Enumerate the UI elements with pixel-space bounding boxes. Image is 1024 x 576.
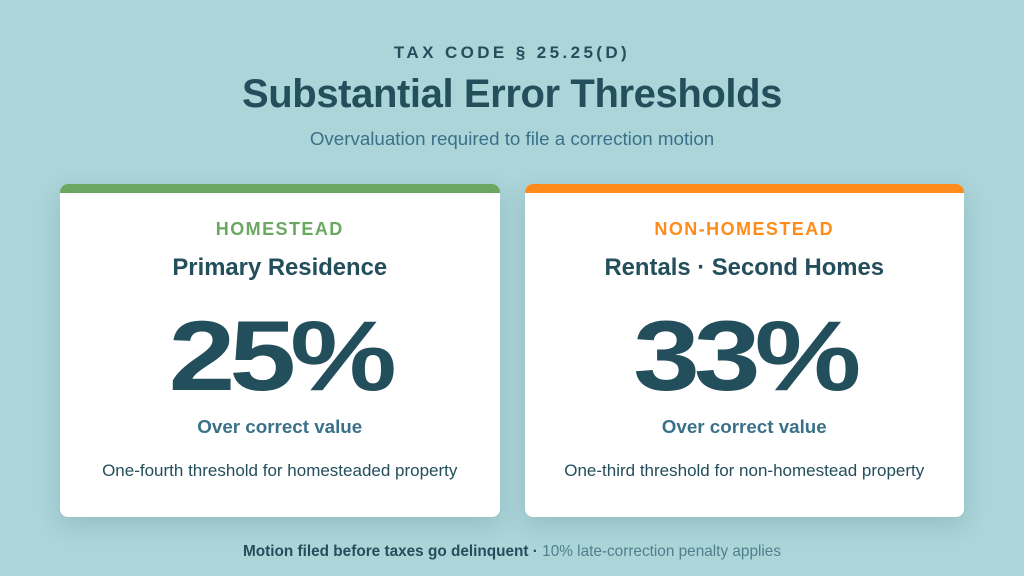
footer note: Motion filed before taxes go delinquent · 10% late-correction penalty applies bbox=[243, 543, 781, 560]
caption: over correct value: Over correct value bbox=[197, 416, 362, 437]
subtitle: Overvaluation required to file a correction motion bbox=[310, 128, 714, 149]
panel accent bar: orange bbox=[524, 184, 964, 193]
panel: homestead bbox=[60, 184, 500, 517]
caption: over correct value: Over correct value bbox=[662, 416, 827, 437]
description: non-homestead threshold: One-third threshold for non-homestead property bbox=[564, 461, 924, 480]
big number: 25%: 25% bbox=[169, 301, 391, 412]
category label: homestead: HOMESTEAD bbox=[216, 219, 344, 239]
heading: rentals and second homes: Rentals · Second Homes bbox=[604, 254, 884, 281]
heading: primary residence: Primary Residence bbox=[172, 254, 387, 281]
panel accent bar: green bbox=[60, 184, 500, 193]
panel: non-homestead bbox=[524, 184, 964, 517]
description: homestead threshold: One-fourth threshold for homesteaded property bbox=[102, 461, 457, 480]
eyebrow: tax code: TAX CODE § 25.25(D) bbox=[394, 43, 630, 62]
category label: non-homestead: NON-HOMESTEAD bbox=[654, 219, 834, 239]
title: Substantial Error Thresholds bbox=[242, 72, 782, 116]
big number: 33%: 33% bbox=[633, 301, 855, 412]
